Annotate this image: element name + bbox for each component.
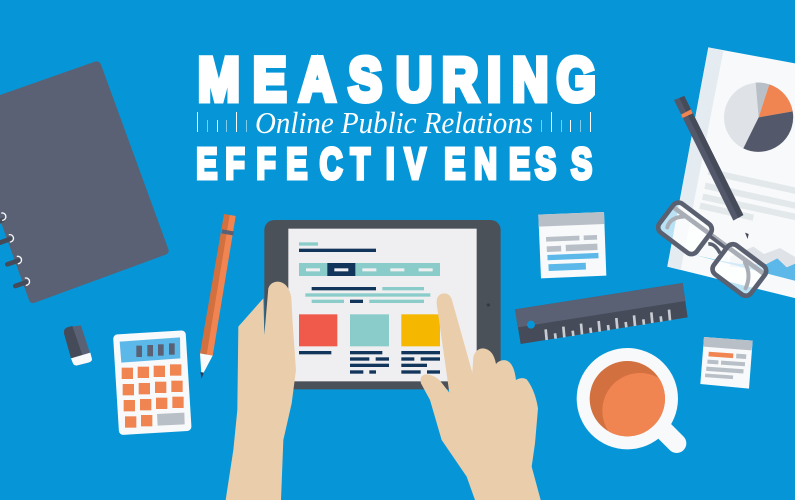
area chart [695,247,795,282]
glasses [656,200,769,298]
subtitle: Online Public Relations: Online Public Relations [255,105,533,140]
report paper [656,47,795,299]
ruler [515,283,688,344]
notebook cover [0,61,169,303]
glasses left lens [656,200,714,257]
calculator equals key [157,413,185,426]
title line: Measuring: MEASURING [198,46,596,114]
tablet [264,220,501,389]
tablet camera [487,303,490,307]
pie chart [724,83,793,152]
notebook rings [0,213,30,286]
coffee cup [577,348,678,449]
glasses right lens [710,242,769,298]
title line: Effectiveness: EFFECTIVENESS [196,139,592,189]
calculator body [113,330,192,435]
icon: orange pencil [200,214,236,379]
paper sheet [667,47,795,299]
dark pencil [674,96,749,239]
glasses bridge [708,237,726,253]
navigation bar [299,263,440,276]
small note card [700,337,753,389]
note card [538,212,606,278]
yellow content block [401,314,440,346]
calculator display [120,337,180,363]
tablet screen [288,229,477,381]
red content block [299,314,337,346]
intro text lines [305,287,430,303]
icon: calculator [113,330,192,435]
tablet frame [264,220,501,389]
paper shaded margin [667,47,723,270]
teal content block [350,314,389,346]
right hand [420,293,541,500]
calculator digits [136,343,175,357]
glasses temple arms [667,208,763,288]
report text lines [700,172,795,218]
calculator keys [122,364,184,428]
icon: notebook [0,61,169,303]
icon: eraser [64,325,92,365]
left hand [226,282,296,500]
title [196,46,596,189]
glasses lenses tint [656,200,769,298]
content captions [299,351,440,374]
page header [299,242,376,252]
subtitle left tick marks [198,112,246,132]
subtitle right tick marks [542,112,590,132]
